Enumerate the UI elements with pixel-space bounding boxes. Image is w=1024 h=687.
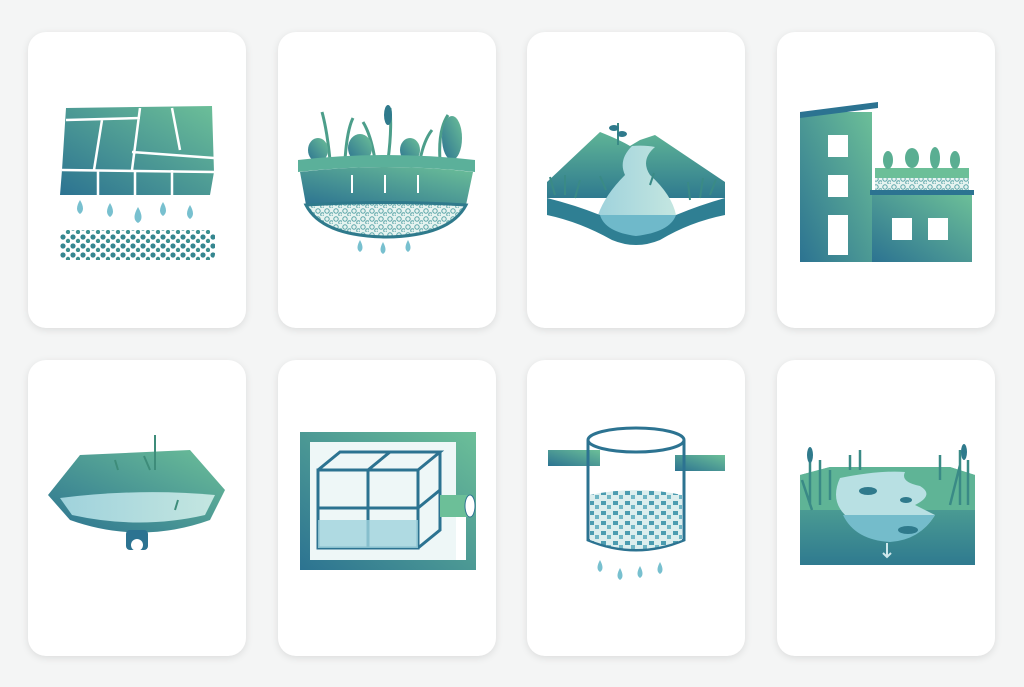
icon: detention basin bbox=[48, 435, 225, 551]
icon: vegetated swale bbox=[547, 123, 725, 245]
icon: constructed wetland bbox=[800, 444, 975, 565]
icon: bioretention planter bbox=[298, 105, 475, 254]
icon: underground storage crates bbox=[300, 432, 476, 570]
icon: building with green roof bbox=[800, 102, 974, 262]
card: swale bbox=[527, 32, 745, 328]
card: infiltration well bbox=[527, 360, 745, 656]
card: bioretention bbox=[278, 32, 496, 328]
card: underground storage bbox=[278, 360, 496, 656]
card: wetland bbox=[777, 360, 995, 656]
card: permeable pavement bbox=[28, 32, 246, 328]
card: green roof bbox=[777, 32, 995, 328]
icon: infiltration well bbox=[548, 428, 725, 580]
card: detention basin bbox=[28, 360, 246, 656]
icon: permeable pavers bbox=[60, 106, 215, 260]
icon: water drops bbox=[77, 200, 193, 223]
